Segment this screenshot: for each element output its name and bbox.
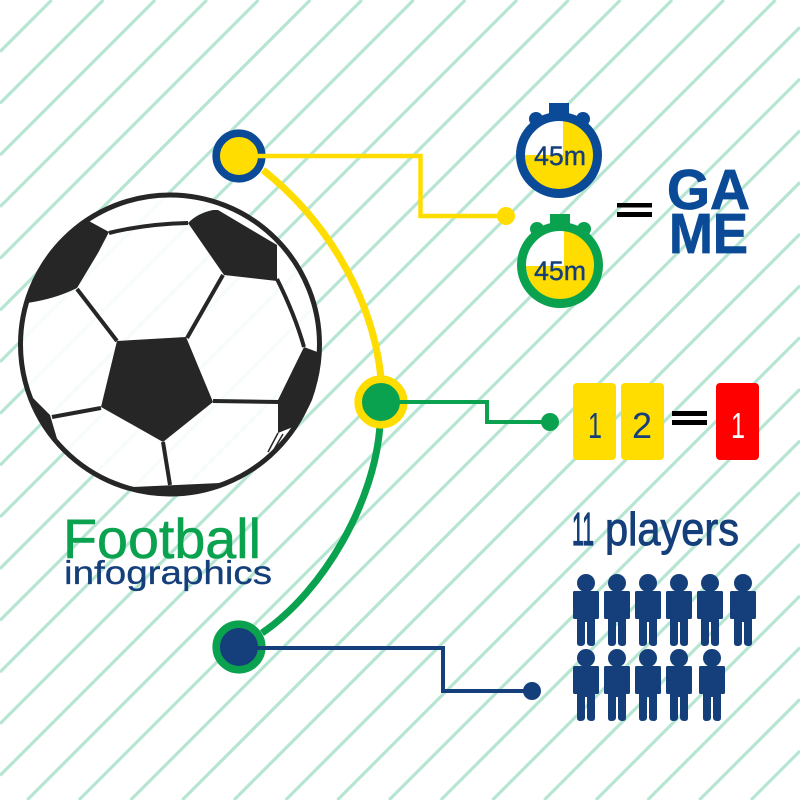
heading: GAME: GA	[667, 158, 750, 222]
arc: yellow connector	[263, 170, 381, 378]
icon: green stopwatch 45 minutes	[522, 214, 598, 304]
card: yellow 2: 2	[632, 405, 652, 446]
icon: football	[20, 195, 320, 496]
card: yellow 1: 1	[588, 405, 602, 446]
heading: GAME: ME	[669, 202, 748, 266]
connector: yellow to stopwatches	[239, 156, 515, 225]
connector: green to cards	[381, 402, 559, 431]
icon: equals sign for cards	[672, 411, 707, 425]
card: red 1	[716, 383, 759, 460]
icon: equals sign for game	[617, 203, 652, 217]
node: green with yellow ring	[358, 379, 404, 425]
icon: blue stopwatch 45 minutes: 45m	[534, 141, 586, 171]
title: Football: Football	[63, 507, 261, 570]
heading: 11 players: 11	[572, 503, 594, 555]
icon: blue stopwatch 45 minutes	[520, 103, 598, 194]
heading: 11 players: players	[605, 503, 739, 555]
heading: GAME	[667, 158, 750, 266]
card: yellow 1	[573, 383, 616, 460]
card: yellow 2	[621, 383, 664, 460]
icons: eleven player figures	[573, 574, 756, 721]
node: navy with green ring	[216, 624, 262, 670]
connector: navy to players	[239, 648, 541, 700]
arc: green connector	[262, 425, 380, 633]
icon: green stopwatch 45 minutes: 45m	[534, 256, 586, 286]
card: red 1: 1	[731, 405, 745, 446]
node: yellow with blue ring	[216, 133, 262, 179]
subtitle: infographics: infographics	[64, 554, 272, 591]
